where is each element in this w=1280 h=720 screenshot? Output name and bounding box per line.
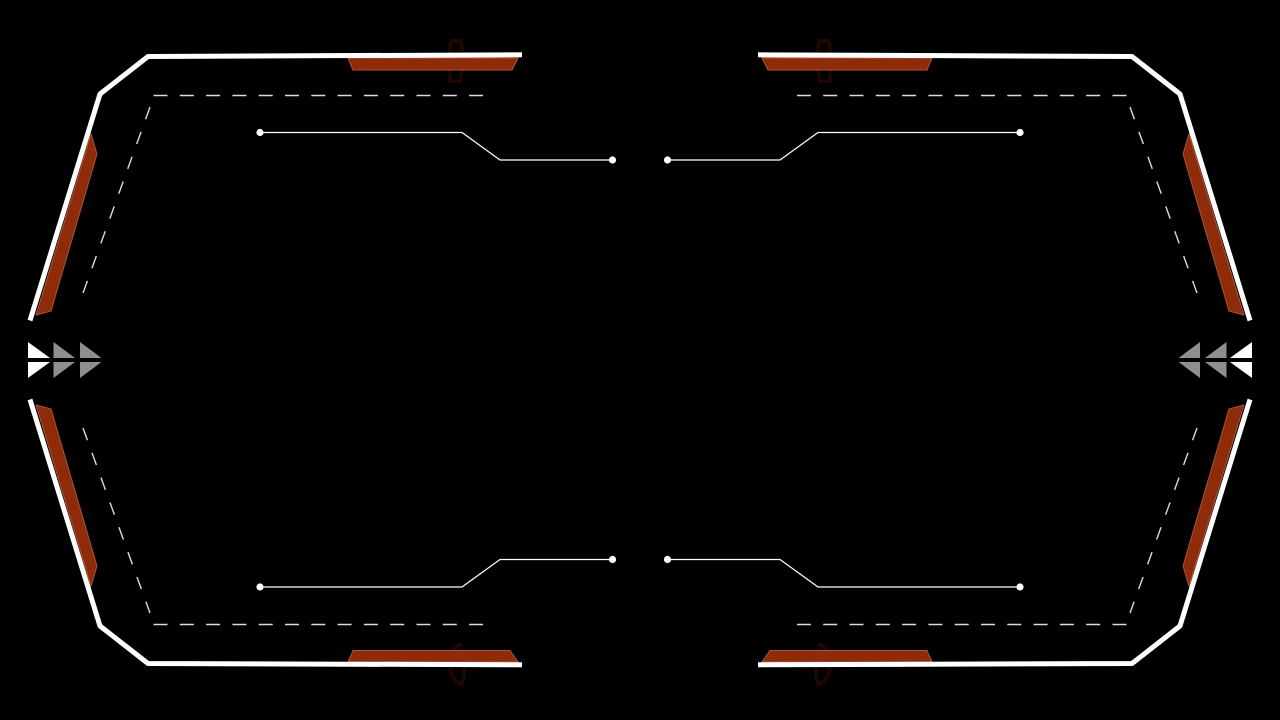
accent: lower left side <box>36 405 97 586</box>
faint red marks behind the top and bottom bars <box>449 41 831 684</box>
icon: left triangle arrows <box>28 342 102 378</box>
dashes: left lower diagonal <box>83 428 150 613</box>
accent: top right bar <box>762 58 932 70</box>
dashes: top right <box>796 94 1126 96</box>
accent: bottom right bar <box>762 650 932 662</box>
frame: bottom left bracket <box>30 400 522 665</box>
connector: bottom left <box>256 556 616 591</box>
accent: upper right side <box>1183 134 1244 315</box>
orange accent panels <box>36 58 1244 662</box>
accent: lower right side <box>1183 405 1244 586</box>
connector: top right <box>664 129 1024 164</box>
accent: bottom left bar <box>348 650 518 662</box>
frame: top right bracket <box>758 55 1250 321</box>
accent: top left bar <box>348 58 518 70</box>
frame: bottom right bracket <box>758 400 1250 665</box>
dashes: bottom right <box>796 624 1126 626</box>
dashes: right lower diagonal <box>1130 428 1197 613</box>
icon: right triangle arrows <box>1178 342 1252 378</box>
dashes: bottom left <box>154 624 484 626</box>
connector: top left <box>256 129 616 164</box>
frame: top left bracket <box>30 55 522 321</box>
accent: upper left side <box>36 134 97 315</box>
connector: bottom right <box>664 556 1024 591</box>
dashes: left upper diagonal <box>83 107 150 293</box>
dashes: top left <box>154 94 484 96</box>
dashed inner frame <box>83 96 1197 624</box>
dashes: right upper diagonal <box>1130 107 1197 293</box>
